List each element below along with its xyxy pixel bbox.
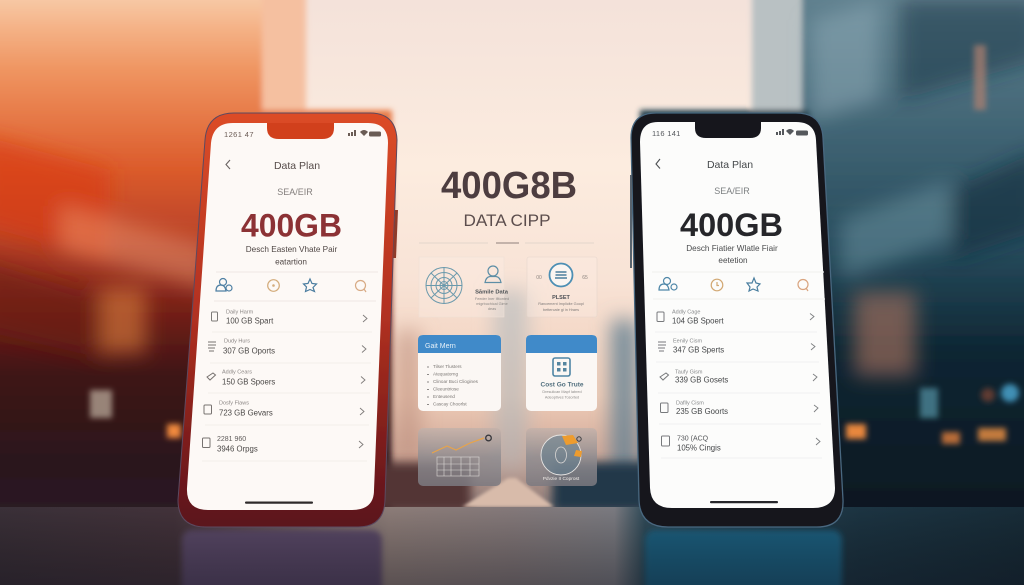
phone body xyxy=(631,113,843,527)
card: preset: bettercate gi in Hraes xyxy=(543,308,579,312)
row 3 xyxy=(660,370,817,384)
row 1: Addly Cage xyxy=(672,310,700,316)
row 5: 730 (ACQ xyxy=(677,436,709,442)
row 1: Daily Harm xyxy=(226,310,254,316)
right building xyxy=(640,0,1024,515)
big value: 400GB xyxy=(241,208,342,244)
row 2: 347 GB Sperts xyxy=(673,346,724,354)
status bar xyxy=(652,129,808,138)
row 4: 235 GB Goorts xyxy=(676,407,728,416)
calculator icon xyxy=(553,358,570,376)
row 3: Taufy Gism xyxy=(675,370,703,376)
row 1 xyxy=(212,310,367,326)
subtitle: SEA/EIR xyxy=(714,186,750,196)
card: simple data: migrbuchical Gime xyxy=(476,302,508,306)
phone reflections xyxy=(182,530,842,585)
card: get item list: Tilser Tlusters xyxy=(433,364,462,369)
description xyxy=(686,244,778,265)
row 2: Dudy Hurs xyxy=(224,338,250,344)
card: data go route xyxy=(526,335,597,411)
card: get item list: Gait Mern xyxy=(425,343,456,350)
row 4: Daflly Cism xyxy=(676,400,704,406)
right phone (dark) xyxy=(630,113,843,527)
card: data go route: Dresulican Mapf Iabred xyxy=(542,390,582,394)
description: Desch Fiatier Wlatle Fiair xyxy=(686,244,778,253)
card: preset: 00 xyxy=(536,275,542,281)
card: preset: PLSET xyxy=(552,295,570,301)
notch xyxy=(695,122,761,138)
status bar xyxy=(224,130,381,139)
home indicator xyxy=(245,502,313,504)
glass card: line chart xyxy=(418,428,501,486)
center subtitle: DATA CIPP xyxy=(464,211,550,230)
icon row xyxy=(214,272,378,301)
status bar: 116 141 xyxy=(652,129,681,138)
screen xyxy=(640,122,835,508)
row 5: 2281 960 xyxy=(217,436,246,443)
left building xyxy=(0,0,392,515)
description xyxy=(246,245,338,266)
row 5 xyxy=(662,436,820,452)
person icon xyxy=(485,266,501,282)
center title: 400G8B xyxy=(441,165,577,207)
row 4 xyxy=(660,400,818,416)
header title: Data Plan xyxy=(707,159,753,171)
description: eatartion xyxy=(275,258,307,266)
card: get item list: Enteusend xyxy=(433,394,455,399)
header title: Data Plan xyxy=(274,160,320,172)
status bar: 1261 47 xyxy=(224,130,254,139)
globe icon xyxy=(426,268,462,304)
row 3: 339 GB Gosets xyxy=(675,376,728,384)
home indicator xyxy=(710,501,778,503)
row 2: 307 GB Oports xyxy=(223,346,275,356)
big value: 400GB xyxy=(680,207,783,243)
center distance xyxy=(396,290,636,490)
card: get item list xyxy=(418,335,501,411)
row 2: Eenily Cism xyxy=(673,338,702,344)
card: get item list: Cascay Choorlst xyxy=(433,402,467,406)
row 4: Dosfy Flaws xyxy=(219,400,249,406)
row 3: Addly Cears xyxy=(222,370,252,376)
card: preset: 65 xyxy=(582,275,588,281)
subtitle: SEA/EIR xyxy=(277,187,313,197)
card: data go route: Adeoptives Tosorted xyxy=(545,396,579,400)
center column xyxy=(418,165,597,486)
road xyxy=(462,478,554,507)
row 3 xyxy=(207,370,365,386)
row 2 xyxy=(658,338,815,354)
glass card: gauge: Pdvzie II Coprost xyxy=(543,476,580,482)
screen xyxy=(187,123,388,510)
row 4: 723 GB Gevars xyxy=(219,408,273,418)
card: simple data xyxy=(419,257,509,317)
row 1: 104 GB Spoert xyxy=(672,316,724,326)
glass card: gauge xyxy=(526,428,597,486)
row 1: 100 GB Spart xyxy=(226,316,274,326)
back arrow xyxy=(226,160,230,169)
card: get item list: Atequatorng xyxy=(433,372,458,376)
description: Desch Easten Vhate Pair xyxy=(246,245,338,254)
row 5: 3946 Orpgs xyxy=(217,444,258,454)
card: data go route: Cost Go Trute xyxy=(541,382,584,388)
row 4 xyxy=(204,400,364,418)
card: simple data: Sāmile Data xyxy=(475,290,509,296)
phone body xyxy=(178,113,397,527)
plan rows xyxy=(655,310,822,458)
plan rows xyxy=(202,310,372,461)
card: get item list: Clinoar Buci Cliogines xyxy=(433,379,479,384)
icon row xyxy=(652,272,825,299)
table surface xyxy=(0,507,1024,585)
row 1 xyxy=(657,310,814,326)
description: eetetion xyxy=(718,256,748,265)
back arrow xyxy=(656,159,660,168)
card: simple data: deas xyxy=(488,307,496,311)
row 5: 105% Cingis xyxy=(677,444,721,452)
card: simple data: Feeder Iner Ifitonted xyxy=(475,297,509,301)
row 5 xyxy=(202,436,363,454)
left phone (red) xyxy=(178,113,398,527)
row 3: 150 GB Spoers xyxy=(222,378,275,386)
card: preset: Rancement Implicite Goopl xyxy=(538,302,584,306)
card: get item list: Cleeuntriose xyxy=(433,386,459,392)
center divider xyxy=(419,242,594,244)
card: preset xyxy=(527,257,597,317)
notch xyxy=(267,123,334,139)
row 2 xyxy=(208,338,366,356)
